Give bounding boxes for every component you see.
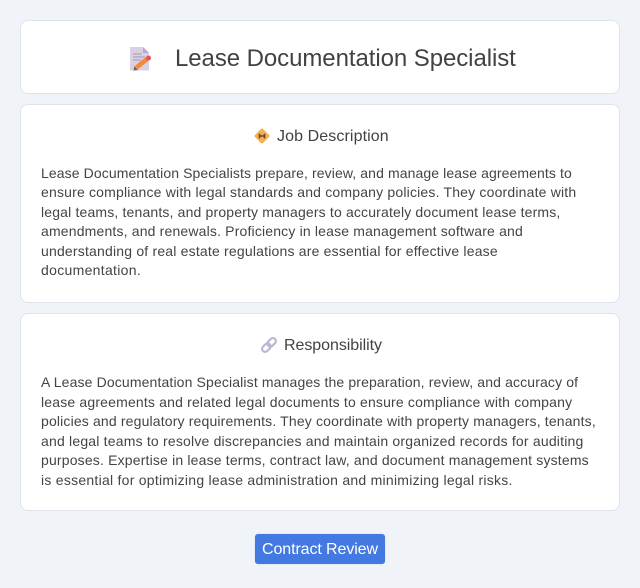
text block: job description: documentation. bbox=[41, 262, 141, 278]
text block: responsibility: purposes. Expertise in lease terms, contract law, and document management systems bbox=[41, 452, 589, 468]
text block: job description bbox=[41, 165, 576, 278]
text block: responsibility: is essential for optimizing lease administration and minimizing legal risks. bbox=[41, 472, 513, 488]
button: contract review: Contract Review bbox=[262, 541, 378, 558]
heading: responsibility: Responsibility bbox=[284, 337, 382, 354]
text block: job description: legal teams, tenants, and property managers to accurately document lease terms, bbox=[41, 204, 560, 220]
icon: diamond sign bbox=[254, 128, 270, 144]
title: Lease Documentation Specialist bbox=[175, 45, 516, 72]
button: contract review bbox=[255, 534, 385, 564]
panel: job description bbox=[20, 104, 620, 303]
icon: chain link bbox=[261, 337, 277, 353]
heading: job description: Job Description bbox=[277, 128, 389, 145]
text block: responsibility: A Lease Documentation Specialist manages the preparation, review, and accuracy of bbox=[41, 374, 578, 390]
text block: responsibility bbox=[41, 374, 596, 488]
text block: responsibility: lease agreements and related legal documents to ensure compliance with company bbox=[41, 394, 572, 410]
text block: job description: understanding of real estate regulations are essential for effective lease bbox=[41, 243, 498, 259]
text block: job description: Lease Documentation Specialists prepare, review, and manage lease agreements to bbox=[41, 165, 572, 181]
text block: responsibility: policies and regulatory requirements. They coordinate with property managers, tenants, bbox=[41, 413, 596, 429]
panel: header bbox=[20, 20, 620, 94]
text block: job description: amendments, and renewals. Proficiency in lease management software and bbox=[41, 223, 523, 239]
icon: document with pencil bbox=[130, 47, 151, 70]
text block: responsibility: and legal teams to resolve discrepancies and maintain organized records for auditing bbox=[41, 433, 583, 449]
text block: job description: ensure compliance with legal standards and company policies. They coordinate with bbox=[41, 184, 576, 200]
panel: responsibility bbox=[20, 313, 620, 511]
